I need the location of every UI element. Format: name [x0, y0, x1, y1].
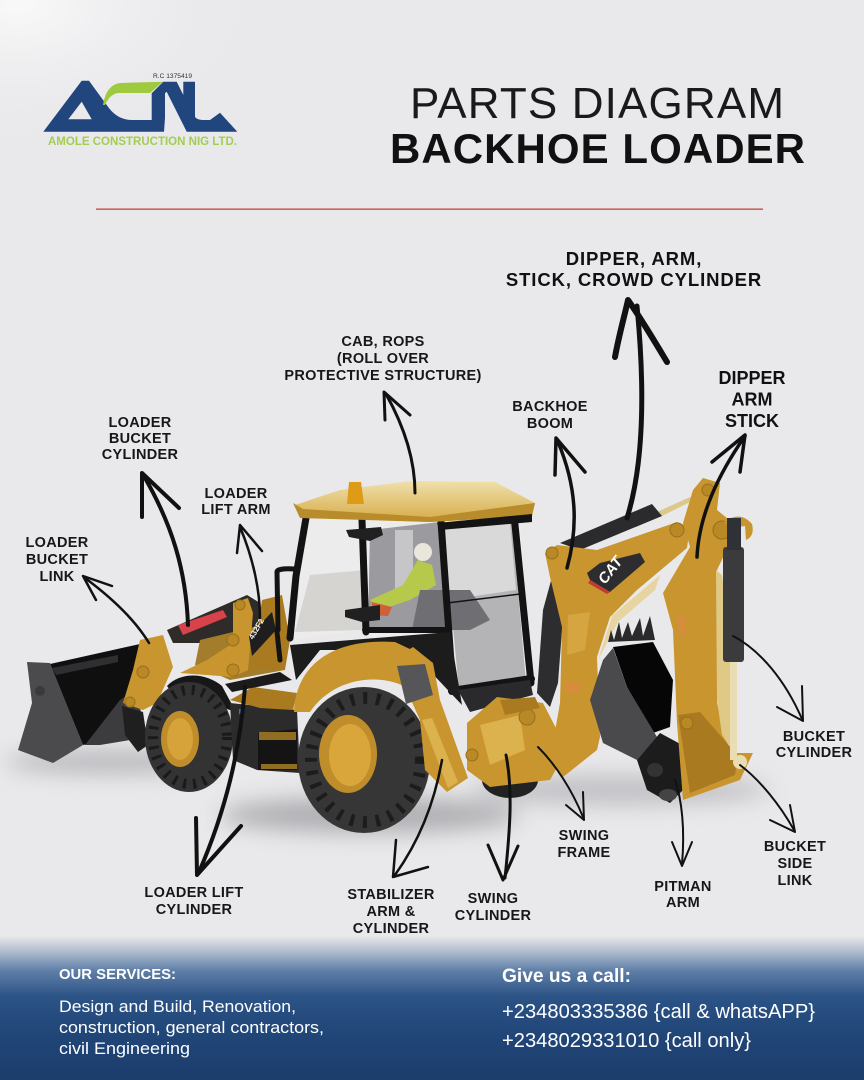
label: bucket side link: BUCKET	[764, 839, 826, 855]
label: swing frame: SWING	[559, 828, 609, 844]
engine hood and red panel	[167, 595, 285, 680]
swing frame	[466, 697, 563, 787]
label: cab ROPS: (ROLL OVER	[337, 351, 429, 367]
label: backhoe boom: BOOM	[527, 416, 573, 432]
phone numbers: +2348029331010 {call only}	[502, 1030, 751, 1052]
stabilizer arm	[393, 647, 468, 792]
arrow: loader lift cylinder	[196, 687, 245, 875]
arrow: dipper cylinder	[615, 300, 667, 518]
label: loader lift arm: LOADER	[204, 486, 268, 502]
arrow: pitman arm	[672, 780, 692, 866]
logo company name: AMOLE CONSTRUCTION NIG LTD.	[48, 136, 237, 148]
backhoe bucket	[590, 616, 697, 803]
bucket cylinder	[723, 516, 753, 769]
cab pillars and frame	[277, 515, 531, 691]
beacon light	[347, 482, 364, 504]
arrow: loader bucket link	[83, 576, 149, 643]
phone numbers: +234803335386 {call & whatsAPP}	[502, 1001, 815, 1023]
label: bucket side link: SIDE	[777, 856, 813, 872]
title line 2: BACKHOE LOADER	[390, 125, 805, 172]
loader bucket	[18, 644, 150, 763]
boom cylinder	[537, 577, 562, 707]
arrow: stabilizer	[393, 760, 442, 877]
rear wheel behind swing frame	[482, 762, 538, 798]
label: cab ROPS: CAB, ROPS	[341, 334, 425, 350]
label: loader bucket cylinder: BUCKET	[109, 431, 171, 447]
chassis, platform and steps	[225, 672, 300, 773]
services text: construction, general contractors,	[59, 1018, 324, 1037]
label: dipper, arm, stick, crowd cylinder: DIPPER, ARM,	[566, 248, 702, 269]
arrow: bucket cylinder	[733, 636, 803, 721]
front wheel	[145, 676, 236, 792]
rear wheel	[298, 687, 430, 833]
label: loader bucket cylinder: LOADER	[108, 415, 172, 431]
title	[390, 79, 805, 172]
label: swing frame: FRAME	[557, 845, 611, 861]
cab windows	[290, 518, 532, 692]
services heading: OUR SERVICES:	[59, 966, 176, 983]
services text: civil Engineering	[59, 1039, 190, 1058]
label: swing cylinder: SWING	[468, 891, 518, 907]
label: loader bucket link: LINK	[39, 569, 75, 585]
red divider	[96, 208, 763, 210]
arrow: swing cylinder	[488, 755, 518, 880]
label: dipper arm stick: ARM	[732, 390, 772, 410]
label: bucket cylinder: CYLINDER	[776, 745, 852, 761]
label: loader bucket link: LOADER	[25, 535, 89, 551]
label: pitman arm: PITMAN	[654, 879, 712, 895]
logo: Amole Construction Nig Ltd	[43, 74, 237, 148]
footer band	[0, 936, 864, 1080]
cab	[277, 481, 535, 712]
label: loader bucket link: BUCKET	[26, 552, 88, 568]
loader lift arm: 432F2	[247, 616, 266, 641]
CAT logo plate: CAT	[595, 552, 628, 587]
label: pitman arm: ARM	[666, 895, 700, 911]
bucket teeth	[608, 616, 655, 642]
label: cab ROPS: PROTECTIVE STRUCTURE)	[284, 368, 482, 384]
label: stabilizer arm and cylinder: CYLINDER	[353, 921, 429, 937]
backhoe boom	[545, 522, 690, 777]
arrow: cab ROPS	[384, 392, 415, 493]
arrow: swing frame	[538, 747, 584, 820]
label: bucket side link: LINK	[777, 873, 813, 889]
label: bucket cylinder: BUCKET	[783, 729, 845, 745]
title line 1: PARTS DIAGRAM	[410, 79, 784, 128]
arrow: dipper arm stick	[697, 435, 745, 557]
operator figure	[370, 543, 490, 630]
ground shadow	[5, 750, 770, 833]
cab roof	[295, 481, 535, 522]
label: loader lift cylinder: CYLINDER	[156, 902, 232, 918]
label: dipper arm stick: STICK	[725, 411, 779, 431]
label: swing cylinder: CYLINDER	[455, 908, 531, 924]
label: loader bucket cylinder: CYLINDER	[102, 447, 178, 463]
logo mark ACNL	[43, 81, 237, 132]
arrow: loader bucket cylinder	[142, 473, 188, 625]
rear fender	[294, 642, 432, 712]
label: dipper arm stick: DIPPER	[718, 368, 786, 388]
loader lift arm	[180, 595, 290, 677]
arrow: backhoe boom	[555, 438, 585, 568]
arrow: loader lift arm	[237, 525, 262, 618]
services text: Design and Build, Renovation,	[59, 997, 296, 1016]
label: stabilizer arm and cylinder: ARM &	[366, 904, 416, 920]
backhoe loader machine	[18, 478, 753, 833]
CAT logo plate	[587, 552, 645, 594]
label: dipper, arm, stick, crowd cylinder: STICK, CROWD CYLINDER	[506, 269, 762, 290]
dipper arm	[663, 478, 753, 800]
label: stabilizer arm and cylinder: STABILIZER	[347, 887, 435, 903]
dipper cylinder	[560, 497, 692, 550]
loader bucket link	[122, 635, 173, 752]
logo registration number: R.C 1375419	[153, 74, 193, 80]
contact heading: Give us a call:	[502, 966, 631, 987]
label: loader lift arm: LIFT ARM	[201, 502, 271, 518]
arrow: bucket side link	[740, 765, 795, 832]
label: backhoe boom: BACKHOE	[512, 399, 588, 415]
label: loader lift cylinder: LOADER LIFT	[144, 885, 244, 901]
